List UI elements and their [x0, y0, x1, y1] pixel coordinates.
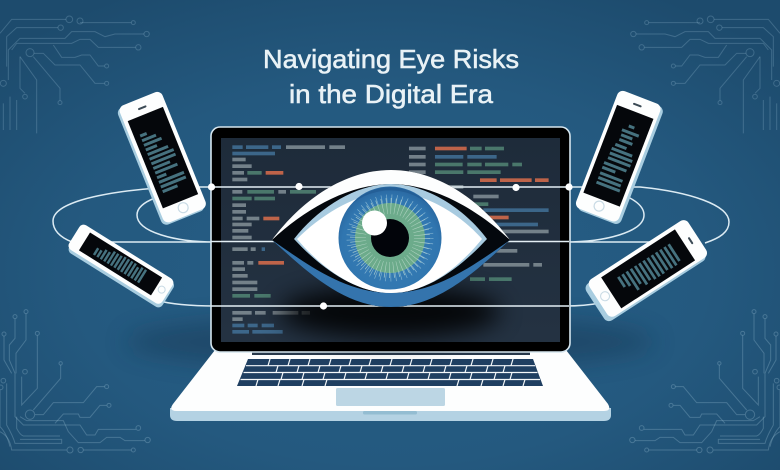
keyboard [237, 359, 543, 386]
orbit lines behind phones [53, 187, 729, 306]
eye outline [272, 170, 510, 307]
title: in the Digital Era [289, 79, 494, 109]
connection lines across the screen [211, 187, 569, 306]
circuit trace: top left [0, 16, 149, 133]
circuit trace: top right [631, 16, 780, 133]
phone: upper right [574, 89, 665, 226]
iris dark top [352, 187, 428, 204]
green ring [355, 203, 425, 273]
phone: upper left [115, 90, 208, 227]
iris rays [358, 206, 422, 270]
base front edge [170, 408, 611, 421]
connection nodes [208, 183, 573, 310]
highlight [362, 210, 387, 236]
laptop shadow [125, 314, 655, 370]
phone: lower right [582, 218, 710, 323]
lid frame [211, 127, 570, 352]
sclera [297, 192, 482, 293]
base deck [171, 350, 609, 411]
laptop screen [211, 127, 570, 352]
title [263, 44, 519, 109]
sclera band [294, 184, 487, 293]
circuit trace: bottom right [630, 310, 780, 453]
touchpad [336, 388, 445, 406]
phone: lower left [65, 223, 177, 309]
hinge [252, 351, 530, 355]
eye cast shadow [280, 286, 500, 338]
laptop base [170, 350, 611, 421]
circuit trace: bottom left [0, 310, 150, 453]
lower lid [272, 240, 510, 307]
front notch [363, 411, 417, 414]
upper lid [272, 170, 510, 240]
iris [338, 186, 442, 290]
pupil [371, 219, 409, 257]
title: Navigating Eye Risks [263, 44, 519, 74]
display [221, 138, 560, 342]
code lines [232, 145, 549, 334]
eye [272, 170, 510, 307]
